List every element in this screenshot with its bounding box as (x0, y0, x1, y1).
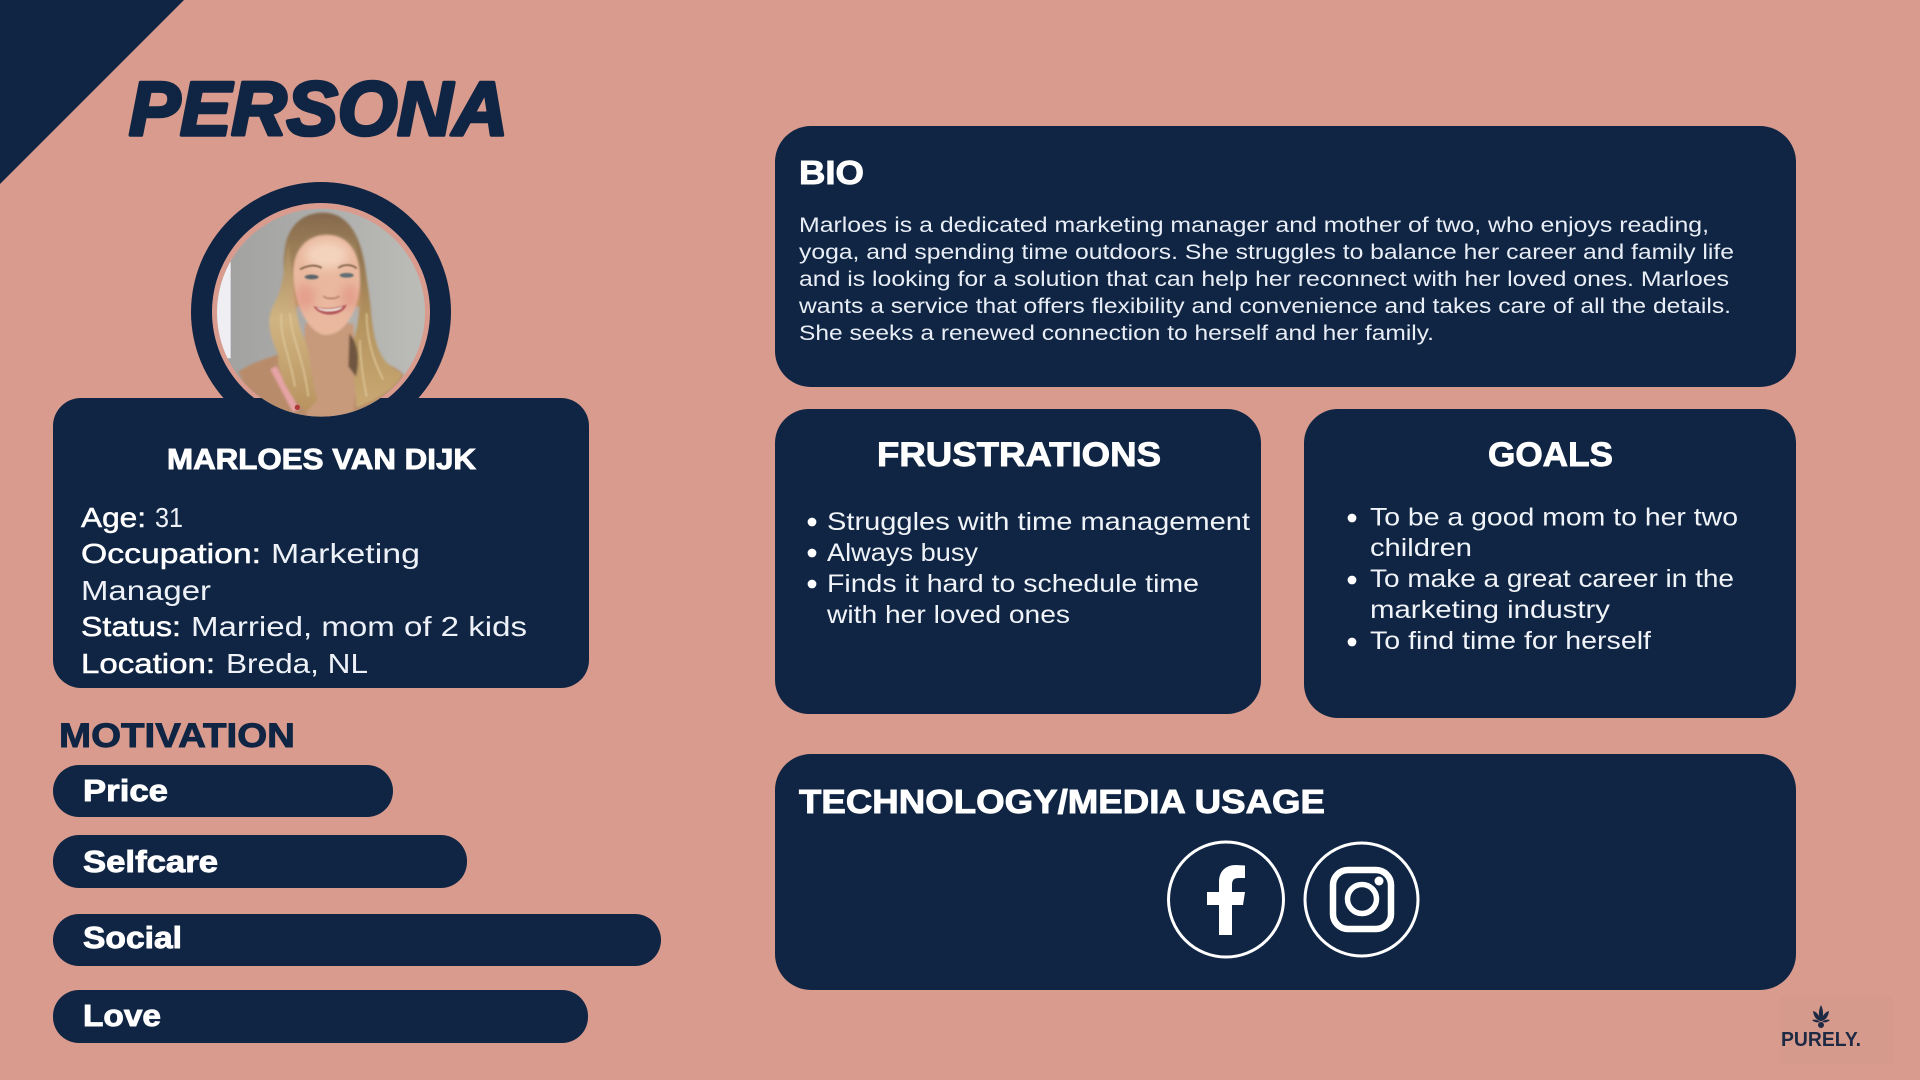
frustrations list: with her loved ones (826, 601, 1070, 629)
frustrations list: Always busy (827, 539, 979, 567)
profile details: Age: (81, 502, 146, 533)
heading: motivation: MOTIVATION (59, 717, 295, 755)
goals list: To find time for herself (1370, 627, 1651, 655)
bar: love (53, 990, 588, 1043)
profile details (81, 502, 527, 679)
profile details: Breda, NL (226, 648, 368, 679)
panel: bio (775, 126, 1796, 387)
goals heading: GOALS (1488, 436, 1613, 474)
bio text: wants a service that offers flexibility and convenience and takes care of all the details. (798, 294, 1731, 318)
profile details: Manager (81, 575, 211, 606)
icon: facebook (1168, 842, 1284, 957)
bio heading: BIO (799, 154, 864, 191)
profile name: MARLOES VAN DIJK (167, 444, 476, 476)
logo: purely (1780, 996, 1894, 1064)
bar: price (53, 765, 393, 817)
bio text: yoga, and spending time outdoors. She struggles to balance her career and family life (799, 240, 1734, 264)
panel: frustrations (775, 409, 1261, 714)
panel: technology and media usage (775, 754, 1796, 990)
profile details: Marketing (271, 538, 420, 569)
frustrations heading: FRUSTRATIONS (877, 436, 1161, 474)
icon: instagram (1305, 843, 1418, 956)
frustrations list (808, 508, 1250, 629)
panel: profile card (53, 398, 589, 688)
profile details: 31 (155, 502, 183, 533)
bar: love: Love (83, 998, 161, 1033)
profile details: Married, mom of 2 kids (191, 611, 527, 642)
logo wordmark: PURELY. (1781, 1029, 1861, 1051)
bar: selfcare (53, 835, 467, 888)
bio text: Marloes is a dedicated marketing manager and mother of two, who enjoys reading, (799, 213, 1709, 237)
profile details: Status: (81, 611, 181, 642)
technology heading: TECHNOLOGY/MEDIA USAGE (799, 783, 1325, 820)
frustrations list: Finds it hard to schedule time (827, 570, 1199, 598)
profile details: Occupation: (81, 538, 261, 569)
panel: goals (1304, 409, 1796, 718)
portrait photo (217, 208, 425, 417)
bar: selfcare: Selfcare (83, 844, 218, 879)
goals list (1348, 504, 1738, 655)
bio text (798, 213, 1734, 345)
bar: price: Price (83, 773, 168, 808)
title: PERSONA (129, 67, 508, 152)
frustrations list: Struggles with time management (827, 508, 1250, 536)
icon: leaf (1812, 1005, 1830, 1028)
goals list: To make a great career in the (1370, 565, 1734, 593)
goals list: marketing industry (1370, 596, 1611, 624)
bio text: She seeks a renewed connection to herself and her family. (799, 321, 1434, 345)
goals list: To be a good mom to her two (1370, 504, 1738, 532)
profile details: Location: (81, 648, 215, 679)
goals list: children (1370, 534, 1472, 562)
bio text: and is looking for a solution that can help her reconnect with her loved ones. Marloes (799, 267, 1729, 291)
bar: social (53, 914, 661, 966)
corner triangle (0, 0, 184, 184)
avatar ring (191, 182, 451, 442)
bar: social: Social (83, 920, 182, 955)
